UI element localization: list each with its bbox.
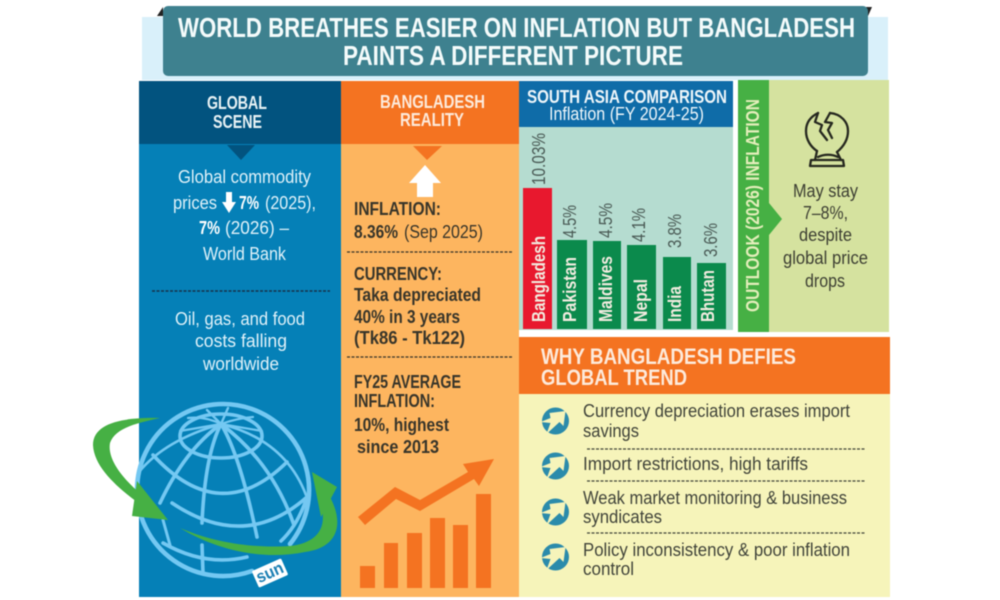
panel: why bangladesh defies global trend bbox=[519, 337, 890, 597]
heading: bangladesh reality: REALITY bbox=[400, 110, 464, 130]
icon: arrow bullet 4 bbox=[540, 544, 569, 570]
text: fy25 average: 10%, highest bbox=[354, 415, 449, 435]
bar chart: inflation by country bbox=[523, 133, 726, 329]
heading: global scene: SCENE bbox=[213, 112, 262, 132]
text: outlook forecast: May stay bbox=[793, 181, 858, 201]
icon: up arrow bbox=[409, 165, 441, 197]
heading: global scene: GLOBAL bbox=[207, 93, 267, 113]
text: inflation: 8.36% bbox=[354, 222, 398, 242]
text: inflation: (Sep 2025) bbox=[404, 222, 483, 242]
text: commodity prices: 7% bbox=[239, 193, 259, 213]
text: reasons list: syndicates bbox=[583, 507, 662, 527]
text: falling costs: worldwide bbox=[202, 354, 279, 374]
bar chart: inflation by country: 4.1% bbox=[629, 208, 649, 242]
bar chart: inflation by country: 3.8% bbox=[665, 214, 685, 248]
text: outlook forecast: despite bbox=[799, 225, 852, 245]
bar chart: inflation by country: Bangladesh bbox=[529, 236, 549, 322]
bar chart: inflation by country: Pakistan bbox=[560, 257, 580, 322]
text: fy25 average bbox=[354, 372, 461, 457]
text: commodity prices: (2026) – bbox=[225, 218, 289, 238]
heading: bangladesh reality bbox=[380, 92, 485, 130]
arrow: green left bbox=[93, 418, 168, 520]
text: commodity prices: Global commodity bbox=[178, 167, 311, 187]
logo: sun: sun bbox=[253, 558, 286, 587]
text: reasons list: Weak market monitoring & business bbox=[583, 488, 847, 508]
icon: globe with arrows bbox=[93, 404, 337, 588]
bar chart: inflation by country: 10.03% bbox=[529, 133, 549, 185]
text: fy25 average: INFLATION: bbox=[354, 391, 435, 411]
bar chart: inflation by country: Maldives bbox=[596, 256, 616, 322]
text: currency: (Tk86 - Tk122) bbox=[354, 328, 465, 348]
arrow: green right bbox=[180, 472, 337, 555]
icon: arrow bullet 1 bbox=[540, 408, 569, 434]
text: reasons list: Currency depreciation erases import bbox=[583, 401, 850, 421]
text: reasons list: Import restrictions, high tariffs bbox=[583, 454, 808, 474]
text: reasons list: savings bbox=[583, 421, 639, 441]
bar chart: inflation by country: Bhutan bbox=[698, 270, 718, 322]
heading: global scene bbox=[207, 93, 267, 132]
icon: rising bar chart bbox=[358, 459, 494, 588]
heading: why bangladesh bbox=[541, 344, 796, 390]
panel: south asia comparison bbox=[519, 81, 733, 330]
bar chart: inflation by country: 4.5% bbox=[560, 205, 580, 238]
text: reasons list: Policy inconsistency & poor inflation bbox=[583, 540, 850, 560]
text: falling costs: Oil, gas, and food bbox=[175, 309, 305, 329]
heading: why bangladesh: GLOBAL TREND bbox=[541, 365, 687, 390]
text: falling costs bbox=[175, 309, 305, 374]
bar chart: inflation by country: 3.6% bbox=[701, 223, 721, 257]
panel: outlook bbox=[738, 80, 889, 332]
heading: south asia comparison: Inflation (FY 2024-25) bbox=[549, 104, 704, 124]
text: currency bbox=[354, 264, 481, 348]
text: commodity prices: 7% bbox=[199, 218, 220, 238]
text: currency: 40% in 3 years bbox=[354, 307, 460, 327]
text: reasons list: control bbox=[583, 559, 634, 579]
text: outlook forecast: 7–8%, bbox=[803, 203, 848, 223]
bar chart: inflation by country: Nepal bbox=[631, 279, 651, 322]
heading: south asia comparison bbox=[527, 87, 727, 124]
text: inflation: INFLATION: bbox=[354, 199, 441, 219]
panel: global scene bbox=[139, 81, 341, 597]
heading: why bangladesh: WHY BANGLADESH DEFIES bbox=[541, 344, 796, 369]
panel: bangladesh reality bbox=[341, 81, 519, 597]
icon: arrow bullet 3 bbox=[540, 498, 569, 526]
text: reasons list bbox=[583, 401, 850, 579]
title banner bbox=[142, 6, 888, 80]
icon: cracked crystal ball bbox=[806, 113, 848, 166]
text: commodity prices: (2025), bbox=[265, 193, 316, 213]
text: currency: CURRENCY: bbox=[354, 264, 442, 284]
heading: outlook: OUTLOOK (2026) INFLATION bbox=[743, 99, 763, 312]
icon: arrow bullet 2 bbox=[540, 452, 569, 480]
text: fy25 average: FY25 AVERAGE bbox=[354, 372, 461, 392]
text: fy25 average: since 2013 bbox=[357, 437, 439, 457]
text: commodity prices: prices bbox=[173, 193, 217, 213]
text: inflation bbox=[354, 199, 483, 242]
heading: bangladesh reality: BANGLADESH bbox=[380, 92, 485, 112]
text: commodity prices bbox=[173, 167, 316, 264]
text: currency: Taka depreciated bbox=[354, 285, 481, 305]
text: outlook forecast: drops bbox=[805, 271, 845, 291]
text: outlook forecast: global price bbox=[783, 248, 868, 268]
text: outlook forecast bbox=[783, 181, 868, 291]
heading: south asia comparison: SOUTH ASIA COMPARISON bbox=[527, 87, 727, 107]
text: commodity prices: World Bank bbox=[203, 244, 287, 264]
bar chart: inflation by country: India bbox=[665, 285, 685, 322]
text: falling costs: costs falling bbox=[195, 331, 287, 351]
bar chart: inflation by country: 4.5% bbox=[596, 203, 616, 238]
title banner: PAINTS A DIFFERENT PICTURE bbox=[343, 40, 683, 71]
